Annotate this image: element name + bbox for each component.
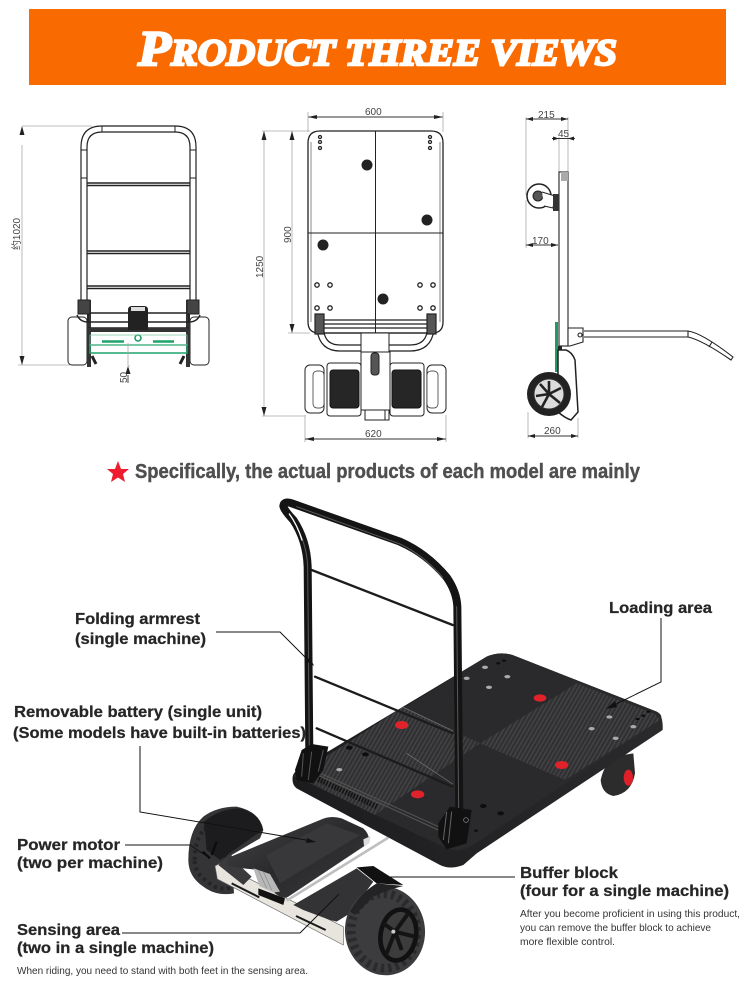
callout: power motor — [17, 837, 208, 872]
1250 and 900 dimensions: 900 — [283, 226, 294, 243]
front rail and ribs — [318, 774, 440, 830]
width 600 dimension: 600 — [365, 107, 382, 118]
left foot pad — [218, 855, 252, 885]
product render: platform cart — [283, 502, 663, 867]
50 dimension — [119, 343, 130, 383]
buffer note: After you become proficient in using this product, — [520, 908, 740, 920]
handle frame — [81, 126, 196, 300]
hinge right — [438, 807, 472, 849]
right foot pad — [293, 868, 373, 922]
front view drawing — [10, 126, 209, 383]
carbon panel left — [297, 707, 480, 815]
hinge left — [295, 744, 328, 783]
side view drawing — [526, 110, 733, 438]
folded handle — [315, 314, 436, 351]
carbon panel right — [480, 683, 660, 780]
title: PRODUCT THREE VIEWS — [137, 20, 617, 76]
icon: red star — [107, 461, 129, 482]
callout: loading area: Loading area — [609, 600, 712, 617]
rear wheel — [188, 807, 263, 894]
callout: removable battery — [13, 704, 316, 843]
width 600 dimension — [308, 107, 443, 132]
callout: removable battery: (Some models have built-in batteries) — [13, 725, 306, 742]
base and wheels — [68, 300, 209, 367]
section heading — [107, 461, 641, 483]
battery — [227, 817, 371, 905]
platform bolts and buttons — [336, 659, 650, 832]
callout: folding armrest: Folding armrest — [75, 611, 200, 628]
callout: buffer block: Buffer block — [520, 865, 618, 882]
buffer block — [357, 866, 403, 885]
callout: power motor: (two per machine) — [17, 855, 163, 872]
front wheel — [341, 883, 429, 979]
callout: sensing area: Sensing area — [17, 922, 120, 939]
base slots — [232, 883, 326, 930]
callout: buffer block: more flexible control. — [520, 936, 615, 948]
handle — [568, 328, 733, 360]
callout: buffer block — [375, 865, 740, 948]
callout: folding armrest — [75, 611, 314, 666]
rear caster — [601, 753, 635, 796]
platform body — [292, 653, 663, 867]
top view drawing — [255, 107, 446, 442]
1250 and 900 dimensions — [255, 131, 310, 416]
wheel and body — [527, 322, 578, 420]
sensing note: When riding, you need to stand with both feet in the sensing area. — [17, 965, 308, 977]
callout: buffer block: (four for a single machine) — [520, 883, 729, 900]
base with wheels and pedals — [305, 333, 446, 420]
platform edge and caster — [527, 172, 568, 346]
callout: power motor: Power motor — [17, 837, 120, 854]
50 dimension: 50 — [119, 371, 130, 383]
heading text: Specifically, the actual products of each model are mainly — [135, 461, 641, 483]
width 260 dimension — [528, 412, 578, 438]
steel base — [215, 863, 343, 945]
steel rail — [287, 838, 388, 901]
dimensions: 170 — [532, 236, 549, 247]
width 260 dimension: 260 — [544, 426, 561, 437]
product render: balance scooter — [188, 807, 429, 979]
dimensions: 215 — [538, 110, 555, 121]
callout: folding armrest: (single machine) — [75, 631, 206, 648]
height dimension — [10, 126, 92, 365]
platform top — [293, 653, 661, 850]
platform outline — [308, 131, 443, 333]
dimensions — [526, 110, 575, 248]
callout: sensing area: (two in a single machine) — [17, 940, 214, 957]
height dimension: 约1020 — [10, 218, 23, 250]
width 620 dimension — [305, 415, 446, 442]
width 620 dimension: 620 — [365, 429, 382, 440]
title banner — [29, 9, 726, 85]
1250 and 900 dimensions: 1250 — [255, 255, 266, 278]
callout: buffer block: you can remove the buffer block to achieve — [520, 922, 711, 934]
callout: loading area — [606, 600, 712, 709]
callout: removable battery: Removable battery (single unit) — [14, 704, 262, 721]
folding handle — [283, 502, 459, 818]
dimensions: 45 — [558, 129, 570, 140]
callout: sensing area — [17, 894, 339, 977]
